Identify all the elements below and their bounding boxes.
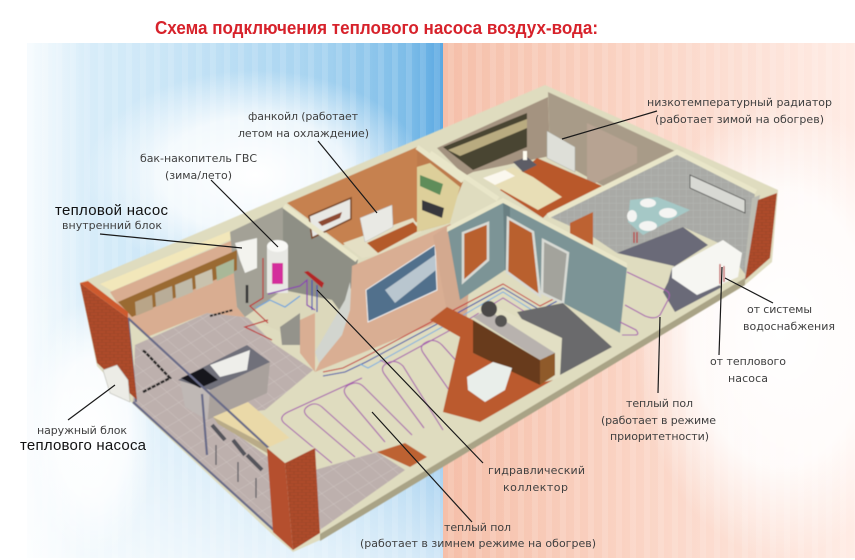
floor slab	[80, 85, 778, 552]
label: from heat pump: от теплового	[710, 355, 786, 368]
label: radiator: (работает зимой на обогрев)	[655, 113, 824, 126]
outdoor unit	[103, 365, 130, 402]
wardrobe door	[587, 123, 637, 187]
hot water tank	[267, 240, 288, 293]
dining table and chairs	[212, 402, 300, 498]
bookcase	[417, 163, 460, 232]
utility room pipes	[210, 258, 317, 340]
bedroom wood floor	[500, 158, 602, 218]
heat pump indoor unit	[235, 238, 257, 273]
label: priority floor heating: теплый пол	[626, 397, 693, 410]
label: hot water tank: (зима/лето)	[165, 169, 232, 182]
left brick wall	[80, 281, 137, 400]
bathtub	[672, 240, 742, 295]
bed	[483, 167, 562, 210]
utility room walls	[230, 207, 358, 366]
utility partition stub	[280, 313, 315, 372]
leader lines	[68, 111, 773, 522]
label: winter floor heating: (работает в зимнем режиме на обогрев)	[360, 537, 596, 550]
label: water supply: от системы	[747, 303, 812, 316]
kitchen back wall	[110, 240, 245, 337]
right brick wall	[745, 193, 777, 282]
door	[570, 212, 593, 250]
lamp	[523, 151, 527, 160]
label: fancoil: фанкойл (работает	[248, 110, 359, 123]
kitchen shelves	[118, 250, 237, 317]
bathroom	[550, 152, 755, 312]
kitchen tiled floor	[133, 313, 313, 530]
label: heat pump outdoor unit: наружный блок	[37, 424, 127, 437]
label: heat pump indoor unit: тепловой насос	[55, 202, 168, 219]
refrigerant hose	[142, 350, 170, 392]
supply pipes	[634, 232, 724, 284]
kitchen island	[178, 345, 270, 420]
living room wall with picture	[315, 224, 472, 372]
label: priority floor heating: (работает в режиме	[601, 414, 716, 427]
label: water supply: водоснабжения	[743, 320, 835, 333]
bathroom side heating loops	[620, 272, 669, 335]
glazed front wall frame	[128, 318, 277, 533]
label: heat pump indoor unit: внутренний блок	[62, 219, 162, 232]
label: collector: гидравлический	[488, 464, 585, 477]
label: priority floor heating: приоритетности)	[610, 430, 709, 443]
bedroom	[437, 92, 675, 218]
partitions tops	[284, 147, 756, 260]
house cutaway plan	[80, 85, 778, 552]
fancoil floor	[367, 222, 420, 253]
fancoil room	[287, 147, 463, 258]
label: winter floor heating: теплый пол	[444, 521, 511, 534]
front tiled floor	[315, 452, 405, 530]
title: Схема подключения теплового насоса воздух-вода:	[155, 18, 598, 38]
label: fancoil: летом на охлаждение)	[238, 127, 369, 140]
dark floor	[517, 303, 612, 375]
nightstand	[513, 157, 537, 172]
fancoil unit	[360, 205, 393, 242]
front brick pillar	[267, 438, 320, 550]
radiator	[547, 131, 575, 172]
blue-grey wall with doors	[447, 198, 627, 333]
label: from heat pump: насоса	[728, 372, 768, 385]
front wood patch	[377, 443, 427, 467]
floor heating loops	[282, 340, 478, 463]
label: heat pump outdoor unit: теплового насоса	[20, 437, 147, 454]
bathroom window	[690, 175, 745, 213]
pipe bundle along wall	[323, 284, 565, 376]
label: hot water tank: бак-накопитель ГВС	[140, 152, 257, 165]
label: radiator: низкотемпературный радиатор	[647, 96, 832, 109]
label: collector: коллектор	[503, 481, 568, 494]
collector	[304, 271, 324, 288]
armchair	[467, 362, 512, 402]
sideboard	[473, 301, 562, 385]
picture: airplane	[309, 198, 351, 238]
sink table	[628, 197, 690, 235]
wood floor	[430, 307, 553, 422]
kitchen wall top	[100, 231, 234, 291]
